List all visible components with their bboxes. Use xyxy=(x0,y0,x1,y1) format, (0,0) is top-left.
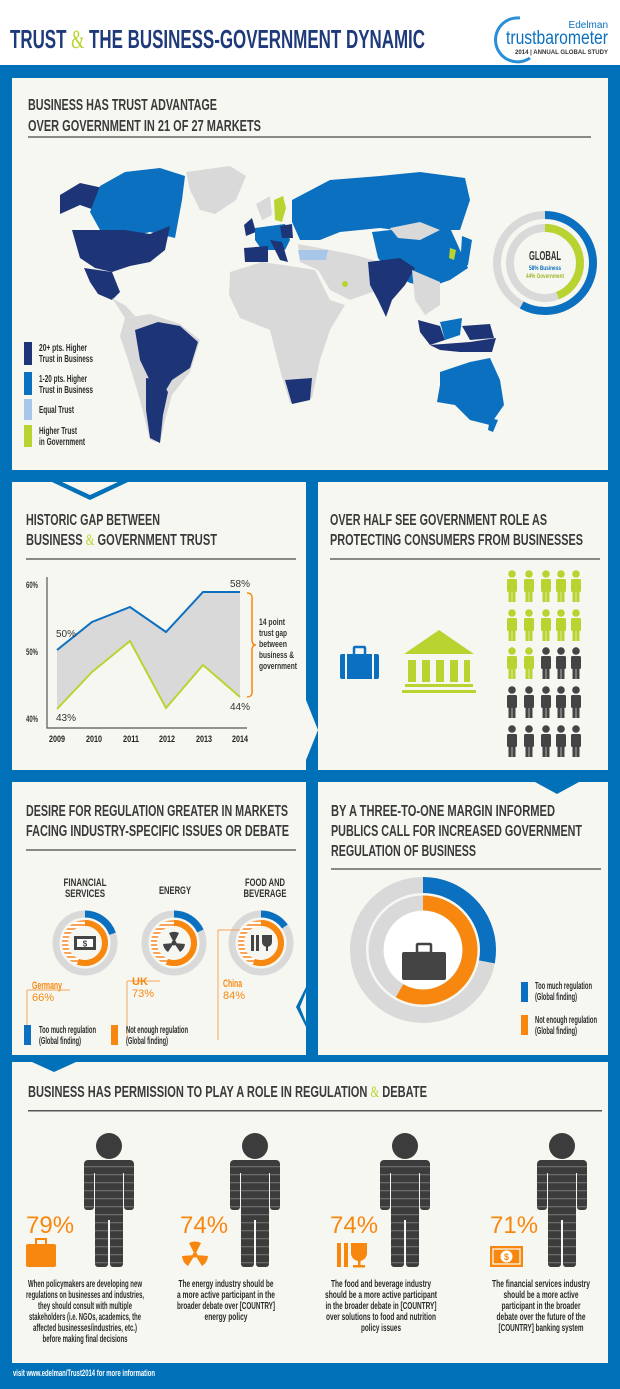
line chart: 2012 xyxy=(159,734,175,744)
map legend: Equal Trust xyxy=(39,405,74,416)
callout: 14 point gap: 14 point xyxy=(259,617,285,627)
stat: 74% food: 74% xyxy=(330,1212,378,1239)
map legend: Trust in Business xyxy=(39,354,93,365)
stat: 74% food xyxy=(325,1133,437,1334)
stat: 74% energy: 74% xyxy=(180,1212,228,1239)
heading: regulation by industry: FACING INDUSTRY-SPECIFIC ISSUES OR DEBATE xyxy=(26,823,289,840)
line chart: 43% xyxy=(56,713,76,724)
heading: regulation by industry xyxy=(26,803,289,840)
heading: three-to-one xyxy=(331,803,582,860)
donut: food and beverage: BEVERAGE xyxy=(244,888,286,900)
legend: regulation: (Global finding) xyxy=(126,1036,168,1047)
title: TRUST & THE BUSINESS-GOVERNMENT DYNAMIC xyxy=(10,24,425,54)
line chart: 44% xyxy=(230,702,250,713)
heading: three-to-one: REGULATION OF BUSINESS xyxy=(331,843,476,860)
line chart: 50% xyxy=(26,647,38,657)
callout: 14 point gap xyxy=(247,593,297,697)
logo: Edelman xyxy=(569,20,608,31)
callout: 14 point gap: business & xyxy=(259,650,294,660)
line chart: 2011 xyxy=(123,734,139,744)
global donut: GLOBAL xyxy=(529,248,561,263)
donut: informed publics xyxy=(358,885,488,1015)
stat: 79% xyxy=(26,1133,144,1345)
donut: energy: UK xyxy=(132,976,148,988)
legend: informed publics: (Global finding) xyxy=(535,1026,577,1037)
stat: 71% financial: $ xyxy=(504,1252,509,1262)
legend: regulation: Not enough regulation xyxy=(126,1025,188,1036)
stat: 79%: affected businesses/industries, etc.) xyxy=(33,1323,137,1334)
donut: financial services: $ xyxy=(83,940,88,948)
heading: government role xyxy=(330,512,583,549)
line chart xyxy=(26,577,250,744)
donut: energy: ENERGY xyxy=(159,885,191,897)
stat: 71% financial: participant in the broader xyxy=(502,1301,581,1312)
callout: 14 point gap: trust gap xyxy=(259,628,287,638)
global donut xyxy=(497,215,593,311)
line chart: 2009 xyxy=(49,734,65,744)
map legend: Higher Trust xyxy=(39,426,77,437)
map legend: in Government xyxy=(39,437,85,448)
donut: food and beverage: 84% xyxy=(223,990,245,1002)
legend: regulation: (Global finding) xyxy=(39,1036,81,1047)
icon: government building xyxy=(402,630,476,693)
stat: 74% energy xyxy=(177,1133,280,1323)
panel: regulation by industry xyxy=(12,782,306,1055)
stat: 74% energy: The energy industry should be xyxy=(178,1279,274,1290)
line chart: 2013 xyxy=(196,734,212,744)
logo: 2014 | ANNUAL GLOBAL STUDY xyxy=(515,50,608,56)
panel: permission xyxy=(12,1062,608,1363)
people grid xyxy=(507,570,581,757)
world map xyxy=(60,166,504,443)
heading: historic gap xyxy=(26,512,217,549)
line chart: 50% xyxy=(56,629,76,640)
stat: 74% food: should be a more active participant xyxy=(325,1290,437,1301)
stat: 79%: stakeholders (i.e. NGOs, academics, the xyxy=(29,1312,141,1323)
heading: permission: BUSINESS HAS PERMISSION TO PLAY A ROLE IN REGULATION & DEBATE xyxy=(28,1084,427,1101)
donut: food and beverage xyxy=(218,877,290,1040)
line chart: 60% xyxy=(26,580,38,590)
map legend xyxy=(24,342,93,448)
donut: financial services: FINANCIAL xyxy=(64,877,107,889)
stat: 79%: before making final decisions xyxy=(42,1334,128,1345)
donut: energy: 73% xyxy=(132,988,154,1000)
heading: trust advantage: BUSINESS HAS TRUST ADVANTAGE xyxy=(28,97,217,114)
donut: food and beverage: FOOD AND xyxy=(245,877,285,889)
stat: 71% financial: 71% xyxy=(490,1212,538,1239)
global donut: 58% Business xyxy=(529,266,562,272)
map legend: Trust in Business xyxy=(39,385,93,396)
stat: 79%: 79% xyxy=(26,1212,74,1239)
map legend: 1-20 pts. Higher xyxy=(39,374,87,385)
donut: food and beverage: China xyxy=(223,978,243,990)
stat: 79%: they should consult with multiple xyxy=(38,1301,132,1312)
icon: blue briefcase xyxy=(340,647,379,679)
stat: 74% food: The food and beverage industry xyxy=(331,1279,431,1290)
footer: visit www.edelman/Trust2014 for more information xyxy=(13,1368,155,1378)
heading: historic gap: BUSINESS & GOVERNMENT TRUST xyxy=(26,532,217,549)
line chart: 58% xyxy=(230,579,250,590)
legend: regulation: Too much regulation xyxy=(39,1025,96,1036)
stat: 74% energy: a more active participant in the xyxy=(177,1290,275,1301)
stat: 74% energy: energy policy xyxy=(204,1312,248,1323)
panel: historic gap xyxy=(12,482,306,770)
heading: trust advantage xyxy=(28,97,261,135)
donut: financial services: Germany xyxy=(32,980,63,992)
stat: 79%: When policymakers are developing new xyxy=(28,1279,142,1290)
stat: 79%: regulations on businesses and industries, xyxy=(26,1290,144,1301)
panel: map xyxy=(12,78,608,470)
panel: government role xyxy=(318,482,608,770)
line chart: 2010 xyxy=(86,734,102,744)
legend: informed publics: (Global finding) xyxy=(535,992,577,1003)
legend: informed publics xyxy=(521,981,597,1037)
stat: 74% food: in the broader debate in [COUNTRY] xyxy=(326,1301,436,1312)
heading: historic gap: HISTORIC GAP BETWEEN xyxy=(26,512,160,529)
panel: three-to-one xyxy=(318,782,608,1055)
map legend: 20+ pts. Higher xyxy=(39,343,87,354)
donut: financial services xyxy=(27,877,114,1040)
stat: 71% financial: should be a more active xyxy=(504,1290,579,1301)
donut: financial services: 66% xyxy=(32,992,54,1004)
stat: 74% food: policy issues xyxy=(361,1323,401,1334)
heading: trust advantage: OVER GOVERNMENT IN 21 OF 27 MARKETS xyxy=(28,118,261,135)
global donut: 44% Government xyxy=(526,274,564,280)
stat: 71% financial xyxy=(490,1133,590,1334)
logo xyxy=(496,18,609,62)
line chart: 2014 xyxy=(232,734,248,744)
callout: 14 point gap: government xyxy=(259,661,297,671)
donut: energy xyxy=(127,885,203,1040)
donut: financial services: SERVICES xyxy=(65,888,105,900)
stat: 74% food: over solutions to food and nutrition xyxy=(326,1312,436,1323)
callout: 14 point gap: between xyxy=(259,639,287,649)
legend: regulation xyxy=(24,1025,188,1047)
stat: 74% energy: broader debate over [COUNTRY] xyxy=(177,1301,275,1312)
line chart: 40% xyxy=(26,714,38,724)
heading: regulation by industry: DESIRE FOR REGULATION GREATER IN MARKETS xyxy=(26,803,288,820)
